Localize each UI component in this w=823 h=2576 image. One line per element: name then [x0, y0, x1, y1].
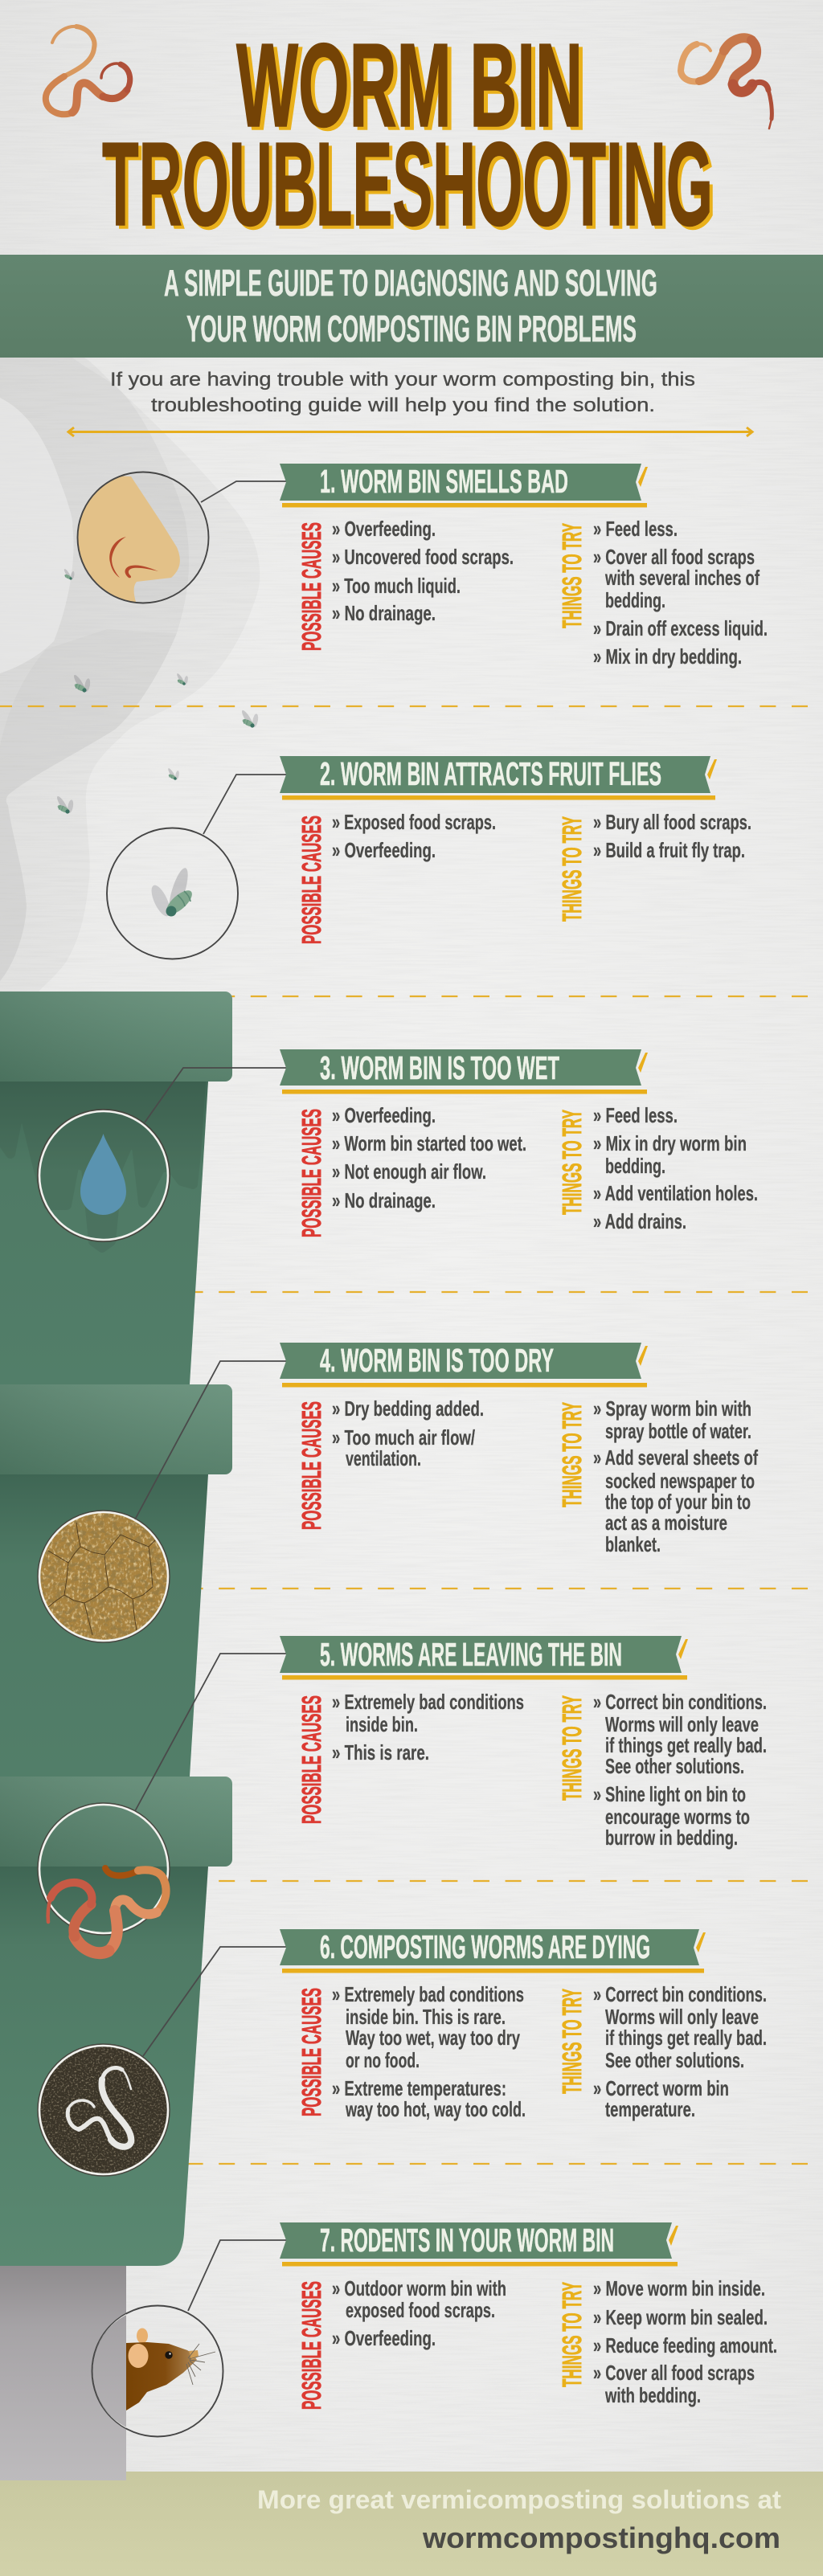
list: causes: » Extremely bad conditions — [332, 1690, 524, 1714]
list: causes: inside bin. — [346, 1712, 418, 1736]
icon: cracked soil in circle — [36, 1509, 171, 1644]
list: things to try — [593, 1396, 758, 1556]
icon: nose in circle — [72, 472, 209, 607]
list: things to try: » Add drains. — [593, 1209, 686, 1233]
list: causes: exposed food scraps. — [346, 2298, 495, 2322]
list: things to try: burrow in bedding. — [605, 1826, 738, 1850]
bin lid 2 — [0, 1384, 232, 1474]
list: causes: » Too much air flow/ — [332, 1425, 475, 1450]
list: causes: Way too wet, way too dry — [346, 2026, 520, 2050]
callout line — [145, 1068, 286, 1122]
panel: 4 too dry — [36, 1342, 758, 1644]
list: things to try: socked newspaper to — [605, 1469, 755, 1493]
icon: right header worm — [681, 38, 772, 129]
list: things to try: See other solutions. — [605, 1754, 744, 1778]
heading ribbon: 3. WORM BIN IS TOO WET — [320, 1049, 559, 1086]
list: causes — [332, 517, 514, 625]
icon: dead worm on soil in circle — [36, 2042, 171, 2177]
list: things to try: Worms will only leave — [605, 2005, 759, 2029]
list: causes: » No drainage. — [332, 1188, 436, 1212]
list: things to try: » Cover all food scraps — [593, 545, 755, 569]
list: things to try — [593, 2276, 777, 2407]
label: things to try: THINGS TO TRY — [557, 523, 587, 628]
list: things to try: » Feed less. — [593, 1103, 678, 1127]
callout line — [143, 1947, 286, 2056]
list: things to try: » Cover all food scraps — [593, 2361, 755, 2385]
list: causes: » Not enough air flow. — [332, 1159, 486, 1184]
panel: 7 rodents — [92, 2222, 777, 2436]
label: things to try: THINGS TO TRY — [557, 1695, 587, 1801]
label: things to try: THINGS TO TRY — [557, 1989, 587, 2094]
list: causes: or no food. — [346, 2048, 420, 2072]
list: causes: » Dry bedding added. — [332, 1396, 484, 1421]
arrow: double-headed divider — [68, 427, 752, 436]
label: possible causes: POSSIBLE CAUSES — [297, 2281, 326, 2410]
list: things to try: » Mix in dry worm bin — [593, 1131, 747, 1155]
panel: 5 worms leaving — [39, 1636, 767, 1953]
icon: small flies — [53, 566, 262, 817]
panel: 1 worm bin smells bad — [72, 463, 768, 669]
list: things to try: bedding. — [605, 588, 665, 612]
list: things to try: with several inches of — [604, 566, 760, 590]
list: things to try: bedding. — [605, 1154, 665, 1178]
list: things to try — [593, 1690, 767, 1850]
list: things to try: » Build a fruit fly trap. — [593, 838, 745, 862]
heading ribbon — [280, 2222, 678, 2266]
heading ribbon — [280, 755, 717, 800]
footer text — [257, 2485, 781, 2554]
label: possible causes: POSSIBLE CAUSES — [297, 1695, 326, 1824]
bin lid 1 — [0, 992, 232, 1082]
list: things to try — [593, 1103, 758, 1233]
list: causes: » Uncovered food scraps. — [332, 545, 514, 569]
list: causes — [332, 1690, 524, 1764]
subtitle banner — [0, 255, 823, 358]
heading ribbon — [280, 1049, 648, 1094]
heading ribbon — [280, 463, 648, 508]
list: causes: » No drainage. — [332, 601, 436, 625]
stacked worm bin — [0, 992, 232, 2266]
callout line — [135, 1654, 286, 1811]
callout line — [201, 481, 286, 502]
title — [102, 19, 716, 254]
list: causes — [332, 1982, 526, 2121]
callout line — [135, 1361, 286, 1519]
list: causes — [332, 1103, 526, 1212]
list: things to try — [593, 517, 768, 669]
list: things to try: encourage worms to — [605, 1805, 750, 1829]
list: causes — [332, 2276, 506, 2350]
label: possible causes: POSSIBLE CAUSES — [297, 522, 326, 651]
list: things to try: » Spray worm bin with — [593, 1396, 751, 1421]
heading ribbon — [280, 1928, 706, 1973]
list: things to try: act as a moisture — [605, 1511, 727, 1535]
list: causes: ventilation. — [346, 1446, 421, 1470]
icon: fly in circle — [107, 828, 238, 959]
list: causes: inside bin. This is rare. — [346, 2005, 506, 2029]
panel: 6 worms dying — [36, 1928, 767, 2177]
list: causes: » Outdoor worm bin with — [332, 2276, 506, 2300]
panel: 3 too wet — [39, 1049, 758, 1241]
label: possible causes: POSSIBLE CAUSES — [297, 1988, 326, 2116]
callout line — [203, 775, 286, 834]
list: causes: way too hot, way too cold. — [345, 2097, 526, 2121]
list: causes: » Extremely bad conditions — [332, 1982, 524, 2006]
heading ribbon: 4. WORM BIN IS TOO DRY — [320, 1342, 554, 1379]
label: things to try: THINGS TO TRY — [557, 816, 587, 922]
list: things to try: See other solutions. — [605, 2048, 744, 2072]
label: things to try: THINGS TO TRY — [557, 1402, 587, 1507]
label: things to try: THINGS TO TRY — [557, 1110, 587, 1215]
callout line — [188, 2240, 286, 2311]
list: causes — [332, 810, 496, 862]
list: things to try: the top of your bin to — [605, 1490, 751, 1514]
list: things to try: » Feed less. — [593, 517, 678, 541]
list: causes — [332, 1396, 484, 1470]
footer text: More great vermicomposting solutions at — [257, 2485, 781, 2514]
intro text: troubleshooting guide will help you find the solution. — [151, 395, 655, 416]
icon: rat in circle — [92, 2306, 223, 2436]
label: possible causes: POSSIBLE CAUSES — [297, 1401, 326, 1530]
list: things to try: temperature. — [605, 2097, 695, 2121]
list: causes: » Exposed food scraps. — [332, 810, 496, 834]
label: possible causes: POSSIBLE CAUSES — [297, 816, 326, 944]
list: causes: » Too much liquid. — [332, 574, 461, 598]
label: things to try: THINGS TO TRY — [557, 2282, 587, 2387]
dashed dividers — [0, 706, 823, 2164]
list: things to try: » Mix in dry bedding. — [593, 644, 742, 669]
list: causes: » This is rare. — [332, 1740, 429, 1764]
heading ribbon: 1. WORM BIN SMELLS BAD — [320, 463, 568, 500]
stand under bin — [0, 2262, 126, 2480]
bin lid 3 — [0, 1777, 232, 1867]
list: things to try: » Add several sheets of — [593, 1445, 758, 1470]
list: causes: » Overfeeding. — [332, 2326, 436, 2350]
icon: left header worm — [46, 27, 130, 114]
list: things to try: » Add ventilation holes. — [593, 1181, 758, 1205]
label: possible causes: POSSIBLE CAUSES — [297, 1109, 326, 1237]
list: things to try: with bedding. — [604, 2383, 701, 2407]
list: things to try — [593, 810, 751, 862]
list: things to try: » Bury all food scraps. — [593, 810, 751, 834]
list: causes: » Overfeeding. — [332, 1103, 436, 1127]
list: things to try: » Shine light on bin to — [593, 1782, 746, 1806]
list: causes: » Overfeeding. — [332, 838, 436, 862]
list: causes: » Extreme temperatures: — [332, 2076, 506, 2100]
panel: 2 fruit flies — [107, 755, 751, 959]
footer text: wormcompostinghq.com — [422, 2521, 780, 2554]
list: causes: » Overfeeding. — [332, 517, 436, 541]
floor — [0, 2472, 823, 2576]
list: things to try — [593, 1982, 767, 2121]
icon: water drop in circle — [39, 1110, 169, 1241]
list: things to try: blanket. — [605, 1532, 661, 1556]
drip stains — [0, 1082, 201, 1248]
list: things to try: » Correct worm bin — [593, 2076, 729, 2100]
list: things to try: Worms will only leave — [605, 1712, 759, 1736]
list: causes: » Worm bin started too wet. — [332, 1131, 526, 1155]
intro text: If you are having trouble with your worm composting bin, this — [110, 369, 695, 390]
intro text — [110, 369, 695, 416]
heading ribbon — [280, 1342, 648, 1387]
smoke: odor clouds — [0, 358, 260, 996]
icon: worm escaping in circle — [39, 1804, 169, 1953]
heading ribbon — [280, 1636, 688, 1679]
list: things to try: spray bottle of water. — [605, 1419, 751, 1443]
